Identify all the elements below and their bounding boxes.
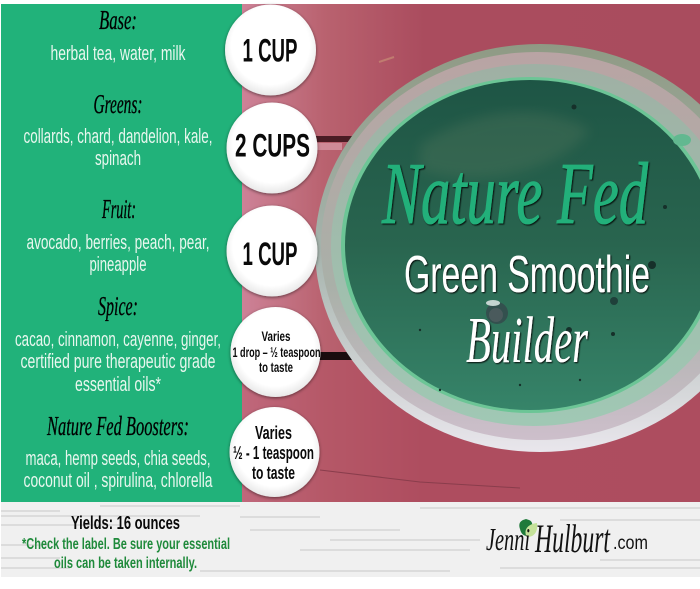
badge: boosters amount: Varies bbox=[255, 423, 292, 443]
text: yields: Yields: 16 ounces bbox=[71, 513, 180, 533]
note: essential oil warning line 1: *Check the label. Be sure your essential bbox=[22, 536, 230, 553]
text: fruit ingredients: avocado, berries, peach, pear, bbox=[26, 232, 210, 254]
heading: Fruit: Fruit: bbox=[101, 194, 136, 224]
badge: 2 cups greens: 2 CUPS bbox=[235, 128, 310, 164]
badge: spice amount: 1 drop – ½ teaspoon bbox=[232, 345, 320, 360]
text: spice ingredients line 3: essential oils* bbox=[75, 374, 161, 396]
badge: 1 cup base: 1 CUP bbox=[242, 32, 298, 68]
heading: Spice: Spice: bbox=[98, 291, 138, 321]
note: essential oil warning line 2: oils can be taken internally. bbox=[54, 555, 197, 572]
text: boosters ingredients: maca, hemp seeds, chia seeds, bbox=[26, 448, 210, 470]
icon: leaf bbox=[519, 519, 537, 537]
badge: boosters amount bbox=[230, 407, 320, 497]
heading: Base: Base: bbox=[99, 5, 137, 35]
heading: Nature Fed Boosters: Nature Fed Boosters: bbox=[46, 411, 189, 441]
logo: Jenni Hulburt.com: .com bbox=[613, 533, 648, 554]
logo: Jenni Hulburt.com bbox=[486, 516, 648, 561]
text: boosters ingredients line 2: coconut oil , spirulina, chlorella bbox=[24, 470, 213, 492]
panel: white wood footer bbox=[1, 502, 700, 577]
text: spice ingredients: cacao, cinnamon, cayenne, ginger, bbox=[15, 329, 221, 351]
text: base ingredients: herbal tea, water, milk bbox=[50, 43, 186, 65]
badge: 1 cup fruit bbox=[226, 206, 318, 296]
logo: Jenni Hulburt.com: Hulburt bbox=[534, 516, 611, 561]
badge: 1 cup base bbox=[225, 4, 316, 96]
text: greens ingredients line 2: spinach bbox=[95, 148, 141, 170]
badge: boosters amount: ½ - 1 teaspoon bbox=[233, 443, 314, 463]
text: greens ingredients: collards, chard, dandelion, kale, bbox=[24, 126, 212, 148]
badge: spice amount: to taste bbox=[259, 360, 293, 375]
text: fruit ingredients line 2: pineapple bbox=[90, 254, 146, 276]
logo: Jenni Hulburt.com: Jenni bbox=[486, 521, 530, 557]
illustration: smoothie jar seen from above bbox=[315, 44, 700, 452]
panel: photo background of red planks bbox=[242, 4, 700, 502]
subtitle: Builder: Builder bbox=[466, 304, 588, 377]
panel: green ingredients list bbox=[1, 4, 242, 502]
badge: 1 cup fruit: 1 CUP bbox=[242, 236, 298, 272]
text: spice ingredients line 2: certified pure therapeutic grade bbox=[20, 351, 216, 373]
badge: spice amount: Varies bbox=[262, 329, 290, 344]
badge: spice amount bbox=[230, 307, 320, 397]
heading: Greens: Greens: bbox=[94, 89, 142, 119]
badge: 2 cups greens bbox=[226, 102, 318, 194]
badge: boosters amount: to taste bbox=[252, 463, 295, 483]
